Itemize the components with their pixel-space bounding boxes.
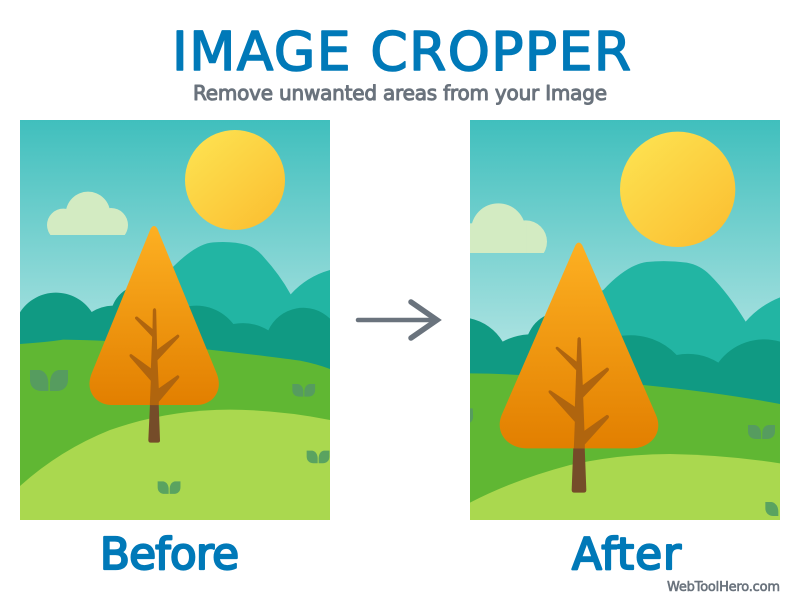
green field	[470, 373, 780, 503]
green field	[20, 340, 330, 486]
light green hill	[470, 454, 780, 520]
front hills	[20, 288, 330, 377]
leaf: right	[292, 384, 315, 397]
leaf: bottom	[158, 481, 180, 494]
label: after: After	[572, 530, 681, 580]
leaf: right	[748, 425, 775, 439]
label: before: Before	[100, 530, 239, 580]
leaf: bottom right	[765, 502, 778, 516]
sky	[20, 120, 330, 312]
tree	[89, 226, 219, 443]
leaf: large	[30, 370, 68, 391]
sun	[185, 130, 285, 230]
sun	[620, 132, 735, 247]
cloud	[470, 203, 547, 253]
light green hill	[20, 410, 330, 520]
panel: after image	[467, 120, 780, 520]
watermark: WebToolHero.com	[667, 580, 780, 595]
cloud	[47, 192, 128, 235]
title: IMAGE CROPPER	[172, 20, 631, 83]
front hills	[470, 315, 780, 410]
panel: before image	[20, 120, 330, 520]
arrow	[358, 302, 437, 338]
back mountains	[528, 261, 780, 363]
subtitle: Remove unwanted areas from your Image	[193, 81, 607, 105]
leaf: lower right	[307, 451, 329, 463]
sky	[470, 120, 780, 342]
back mountains	[173, 242, 330, 330]
tree	[500, 243, 658, 493]
leaf: left edge	[470, 408, 473, 423]
